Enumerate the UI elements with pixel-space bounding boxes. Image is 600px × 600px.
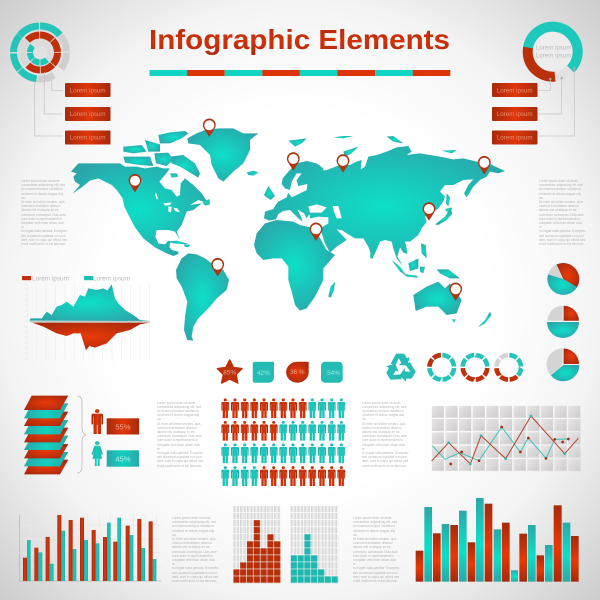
left label: Lorem ipsum 2: Lorem ipsum — [70, 111, 106, 118]
map pin: Brazil — [212, 258, 224, 276]
icon: recycling arrows — [383, 354, 418, 384]
title divider bar — [150, 70, 450, 76]
continent: Australia — [413, 282, 462, 315]
area chart legend: Lorem ipsum — [93, 276, 130, 283]
text block: left of map: Lorem ipsum dolor sit amet, consectetur adipisicing elit, sed do eiusmod tempor incididunt ut labore et dolore magna aliq ua. Ut enim ad minim veniam, quis nostrud exercitation ullamco laboris nisi ut aliquip ex ea commodo consequat. Duis aute irure dolor in reprehenderit in voluptate velit esse cillum dolo re eu fugiat nulla pariatur. Excepteu sint occaecat cupidatat non proi dent, sunt in culpa qui officia des erunt mollit anim id est laborum. — [21, 179, 67, 246]
continent: Eurasia — [264, 146, 505, 267]
continent: North America — [71, 131, 210, 256]
stacked layers diagram — [24, 396, 68, 474]
pie chart 2 — [547, 306, 579, 338]
donut chart with center text: Lorem ipsum — [536, 53, 572, 60]
left connector lines — [35, 72, 63, 136]
pictogram: people grid — [221, 398, 345, 486]
segmented ring 1 — [429, 354, 455, 380]
teal badge 42% — [253, 362, 274, 383]
text block: beside grouped bar chart: Lorem ipsum dolor sit amet, consectetur adipisicing elit, sed do eiusmod tempor incididunt ut labore et dolore magna aliq ua. Ut enim ad minim veniam, quis nostrud exercitation ullamco laboris nisi ut aliquip ex ea commodo consequat. Duis aute irure dolor in reprehenderit in voluptate velit esse cillum dolo re eu fugiat nulla pariatur. Excepteu sint occaecat cupidatat non proi dent, sunt in culpa qui officia des erunt mollit anim id est laborum. — [172, 516, 218, 583]
continent: South America — [176, 253, 229, 341]
red droplet badge 36% — [286, 362, 309, 383]
mirrored area chart — [25, 284, 150, 360]
Asian and European islands — [264, 136, 460, 278]
continent: Africa — [254, 220, 335, 311]
teal badge 54% — [321, 362, 343, 383]
map pin: Australia — [450, 283, 462, 301]
star badge 85% — [217, 360, 242, 383]
text block: beside people grid: Lorem ipsum dolor sit amet, consectetur adipisicing elit, sed do eiusmod tempor incididunt ut labore et dolore magna aliq ua. Ut enim ad minim veniam, quis nostrud exercitation ullamco laboris nisi ut aliquip ex ea commodo consequat. Duis aute irure dolor in reprehenderit in voluptate velit esse cillum dolo re eu fugiat nulla pariatur. Excepteu sint occaecat cupidatat non proi dent, sunt in culpa qui officia des erunt mollit anim id est laborum. — [362, 400, 408, 468]
female share: icon and 45% box: 45% — [115, 454, 131, 464]
inland seas — [308, 204, 342, 218]
title: Infographic Elements — [149, 24, 450, 55]
text block: beside gender shares: Lorem ipsum dolor sit amet, consectetur adipisicing elit, sed do eiusmod tempor incididunt ut labore et dolore magna aliq ua. Ut enim ad minim veniam, quis nostrud exercitation ullamco laboris nisi ut aliquip ex ea commodo consequat. Duis aute irure dolor in reprehenderit in voluptate velit esse cillum dolo re eu fugiat nulla pariatur. Excepteu sint occaecat cupidatat non proi dent, sunt in culpa qui officia des erunt mollit anim id est laborum. — [157, 400, 203, 468]
map pin: Korea — [423, 202, 435, 220]
map pin: Russia — [337, 154, 349, 172]
right label: Lorem ipsum 2 — [492, 107, 538, 121]
right label: Lorem ipsum 1: Lorem ipsum — [497, 87, 533, 94]
teal badge 42%: 42% — [257, 370, 270, 377]
donut chart with center text — [517, 16, 588, 87]
Greenland — [187, 128, 258, 182]
left label: Lorem ipsum 3: Lorem ipsum — [70, 134, 106, 142]
female share: icon and 45% box — [92, 441, 139, 467]
teal badge 54%: 54% — [327, 370, 340, 377]
map pin: Far East — [478, 156, 490, 174]
square-unit chart: red — [233, 506, 281, 583]
Great Lakes — [155, 193, 180, 212]
area chart legend: Lorem ipsum — [32, 276, 69, 283]
red droplet badge 36%: 36 % — [290, 369, 305, 376]
area chart legend — [22, 276, 130, 283]
line chart over tile grid — [432, 406, 581, 471]
text block: beside square-unit charts: Lorem ipsum dolor sit amet, consectetur adipisicing elit, sed do eiusmod tempor incididunt ut labore et dolore magna aliq ua. Ut enim ad minim veniam, quis nostrud exercitation ullamco laboris nisi ut aliquip ex ea commodo consequat. Duis aute irure dolor in reprehenderit in voluptate velit esse cillum dolo re eu fugiat nulla pariatur. Excepteu sint occaecat cupidatat non proi dent, sunt in culpa qui officia des erunt mollit anim id est laborum. — [353, 516, 399, 583]
map pin: Greenland — [203, 119, 216, 137]
left label: Lorem ipsum 3 — [65, 130, 110, 144]
map pin: Egypt — [310, 223, 322, 241]
segmented wheel chart — [3, 15, 77, 90]
right label: Lorem ipsum 3: Lorem ipsum — [497, 134, 533, 142]
star badge 85%: 85% — [223, 370, 236, 377]
Iceland — [247, 171, 258, 176]
text block: right of map: Lorem ipsum dolor sit amet, consectetur adipisicing elit, sed do eiusmod tempor incididunt ut labore et dolore magna aliq ua. Ut enim ad minim veniam, quis nostrud exercitation ullamco laboris nisi ut aliquip ex ea commodo consequat. Duis aute irure dolor in reprehenderit in voluptate velit esse cillum dolo re eu fugiat nulla pariatur. Excepteu sint occaecat cupidatat non proi dent, sunt in culpa qui officia des erunt mollit anim id est laborum. — [539, 179, 585, 246]
donut chart with center text: Lorem ipsum — [536, 45, 572, 52]
grouped bar chart — [19, 514, 161, 581]
pie chart 3 — [547, 348, 579, 381]
male share: icon and 55% box — [92, 409, 139, 434]
bar chart: large red and teal — [416, 498, 579, 582]
Tasmania and New Zealand — [452, 312, 491, 327]
brace — [77, 396, 86, 473]
right connector lines — [538, 68, 574, 136]
left label: Lorem ipsum 2 — [65, 107, 110, 121]
left label: Lorem ipsum 1 — [65, 83, 110, 97]
left label: Lorem ipsum 1: Lorem ipsum — [70, 87, 106, 94]
segmented ring 3 — [491, 350, 526, 385]
Madagascar — [328, 282, 335, 298]
map pin: Scandinavia — [287, 152, 300, 170]
right label: Lorem ipsum 1 — [492, 83, 538, 97]
pie chart 1 — [547, 263, 579, 295]
map pin: Canada — [129, 174, 141, 192]
square-unit chart: teal — [291, 506, 338, 583]
world map — [71, 128, 505, 341]
right label: Lorem ipsum 3 — [492, 130, 538, 144]
right label: Lorem ipsum 2: Lorem ipsum — [497, 111, 533, 118]
segmented ring 2 — [462, 354, 488, 380]
male share: icon and 55% box: 55% — [115, 422, 131, 432]
